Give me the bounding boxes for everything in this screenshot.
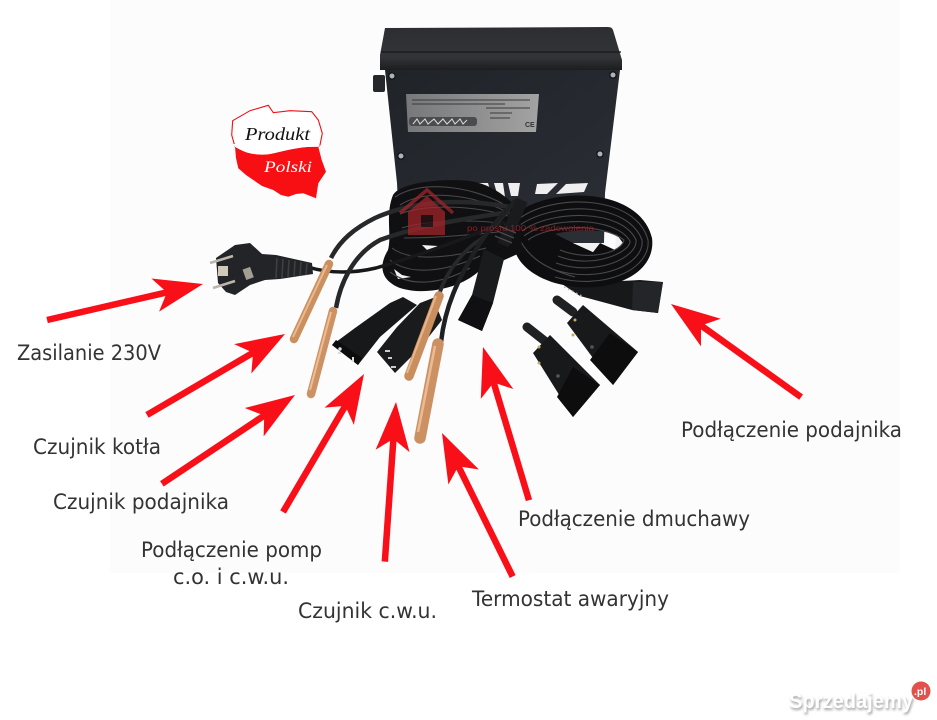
label: pump connection: Podłączenie pomp xyxy=(141,538,322,562)
arrow: feeder xyxy=(661,290,811,411)
arrow: emergency thermostat xyxy=(427,425,528,584)
badge: Produkt Polski map xyxy=(232,105,326,198)
arrow: boiler sensor xyxy=(138,319,294,430)
arrow: power supply xyxy=(43,267,207,337)
arrow: pumps xyxy=(268,365,379,521)
box top face xyxy=(380,27,622,70)
feeder socket xyxy=(562,280,663,313)
label: feeder connection: Podłączenie podajnika xyxy=(681,418,902,442)
cable coil: left loop xyxy=(382,180,522,291)
sensor: hot water xyxy=(418,200,516,438)
screw xyxy=(389,72,616,159)
label: boiler sensor: Czujnik kotła xyxy=(33,435,161,459)
loose plug 1 xyxy=(527,327,600,417)
watermark: Sprzedajemy.pl xyxy=(789,682,930,715)
photo background xyxy=(110,0,900,573)
watermark: Sprzedajemy.pl: .pl xyxy=(914,686,926,698)
power plug xyxy=(210,243,313,295)
arrow: hot water sensor xyxy=(368,401,413,563)
rating plate: CE xyxy=(525,122,535,129)
badge text: Produkt xyxy=(244,124,311,144)
box front panel xyxy=(385,70,620,243)
label: feeder sensor: Czujnik podajnika xyxy=(53,490,229,514)
arrow: blower xyxy=(467,342,545,505)
power cable xyxy=(308,222,505,272)
sensor: emergency thermostat xyxy=(407,205,512,376)
label: pump connection: c.o. i c.w.u. xyxy=(173,565,289,589)
light gaps between bracket tabs xyxy=(478,183,588,197)
loose plug 2 xyxy=(557,300,638,385)
label: emergency thermostat: Termostat awaryjny xyxy=(471,587,669,611)
label: pump connection xyxy=(141,538,322,589)
socket: pumps right xyxy=(377,298,442,373)
socket: pumps left xyxy=(332,297,417,365)
controller box xyxy=(373,27,622,243)
cable coil: right loop xyxy=(514,196,652,287)
label: blower connection: Podłączenie dmuchawy xyxy=(518,507,750,531)
arrow: feeder sensor xyxy=(152,381,304,498)
side knob xyxy=(373,75,385,92)
sensor: boiler xyxy=(293,202,510,339)
rating plate xyxy=(406,94,539,132)
watermark: Sprzedajemy.pl: Sprzedajemy xyxy=(789,690,913,713)
label: hot water sensor: Czujnik c.w.u. xyxy=(298,599,437,623)
sensor: feeder xyxy=(310,212,510,394)
badge: Produkt Polski map: Polski xyxy=(263,159,312,176)
blower connector xyxy=(458,200,522,331)
watermark: Sprzedajemy.pl: Sprzedajemy xyxy=(790,692,914,715)
label: power supply: Zasilanie 230V xyxy=(17,341,162,365)
red watermark xyxy=(400,190,594,235)
red watermark: po prostu 100 % zadowolenia xyxy=(467,223,594,233)
